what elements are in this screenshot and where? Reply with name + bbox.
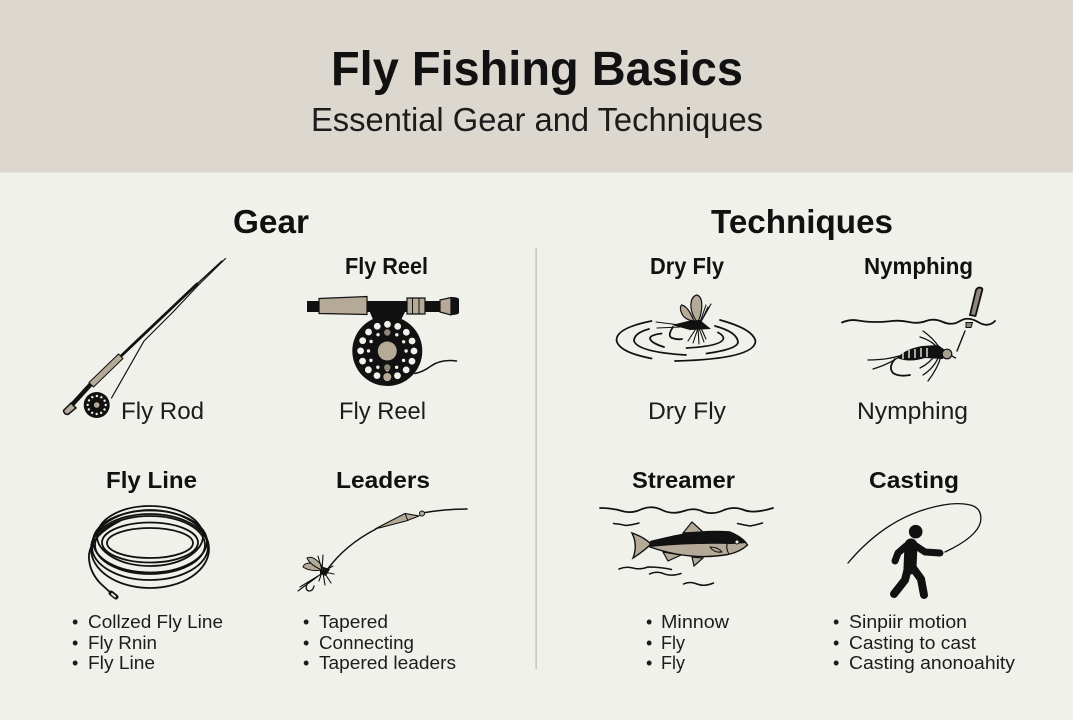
list: streamer: Minnow [661,612,730,632]
list: leaders [303,612,456,673]
list: streamer: • [646,633,652,653]
label: Fly Rod: Fly Rod [121,398,204,425]
panel: dry fly [616,253,756,425]
panel: casting [833,467,1015,673]
list: leaders: Tapered leaders [319,653,456,673]
icon: caster with rod [848,504,981,595]
list: casting: Sinpiir motion [849,612,967,632]
icon: dry fly on ripples [616,295,756,361]
list: leaders: • [303,612,309,632]
heading: Techniques: Techniques [711,203,893,240]
list: fly line: • [72,653,78,673]
icon: minnow in water [600,507,773,585]
panel: fly reel [307,253,459,425]
panel: fly rod [64,258,226,425]
list: fly line: Fly Line [88,653,155,673]
list: fly line: Collzed Fly Line [88,612,223,632]
list: fly line: • [72,612,78,632]
panel: fly line [72,467,223,673]
heading: Dry Fly: Dry Fly [650,253,724,279]
list: streamer: • [646,612,652,632]
heading: Fly Reel: Fly Reel [345,253,428,279]
icon: fly reel [307,296,459,386]
subtitle: Essential Gear and Techniques [311,101,763,138]
list: fly line [72,612,223,673]
heading: Casting: Casting [869,467,959,493]
title: Fly Fishing Basics [331,43,743,96]
icon: coiled fly line [89,506,209,597]
heading: Streamer: Streamer [632,467,735,493]
list: leaders: Connecting [319,633,414,653]
list: leaders: Tapered [319,612,388,632]
icon: fly rod [64,258,226,418]
list: leaders: • [303,633,309,653]
list: casting: • [833,653,839,673]
heading: Gear: Gear [233,203,309,240]
label: Nymphing: Nymphing [857,398,968,425]
icon: tapered leader with fly [298,509,467,591]
label: Dry Fly: Dry Fly [648,398,726,425]
header band [0,0,1073,172]
list: fly line: • [72,633,78,653]
heading: Leaders: Leaders [336,467,430,493]
list: casting: Casting anonoahity [849,653,1015,673]
panel: leaders [298,467,467,673]
list: streamer [646,612,730,673]
icon: nymph under water [842,288,995,381]
list: leaders: • [303,653,309,673]
list: casting: • [833,612,839,632]
list: casting [833,612,1015,673]
list: streamer: Fly [661,633,685,653]
list: fly line: Fly Rnin [88,633,157,653]
list: streamer: • [646,653,652,673]
list: streamer: Fly [661,653,685,673]
heading: Nymphing: Nymphing [864,253,973,279]
panel: nymphing [842,253,995,425]
heading: Fly Line: Fly Line [106,467,197,493]
list: casting: Casting to cast [849,633,976,653]
list: casting: • [833,633,839,653]
panel: streamer [600,467,773,673]
label: Fly Reel: Fly Reel [339,398,426,425]
